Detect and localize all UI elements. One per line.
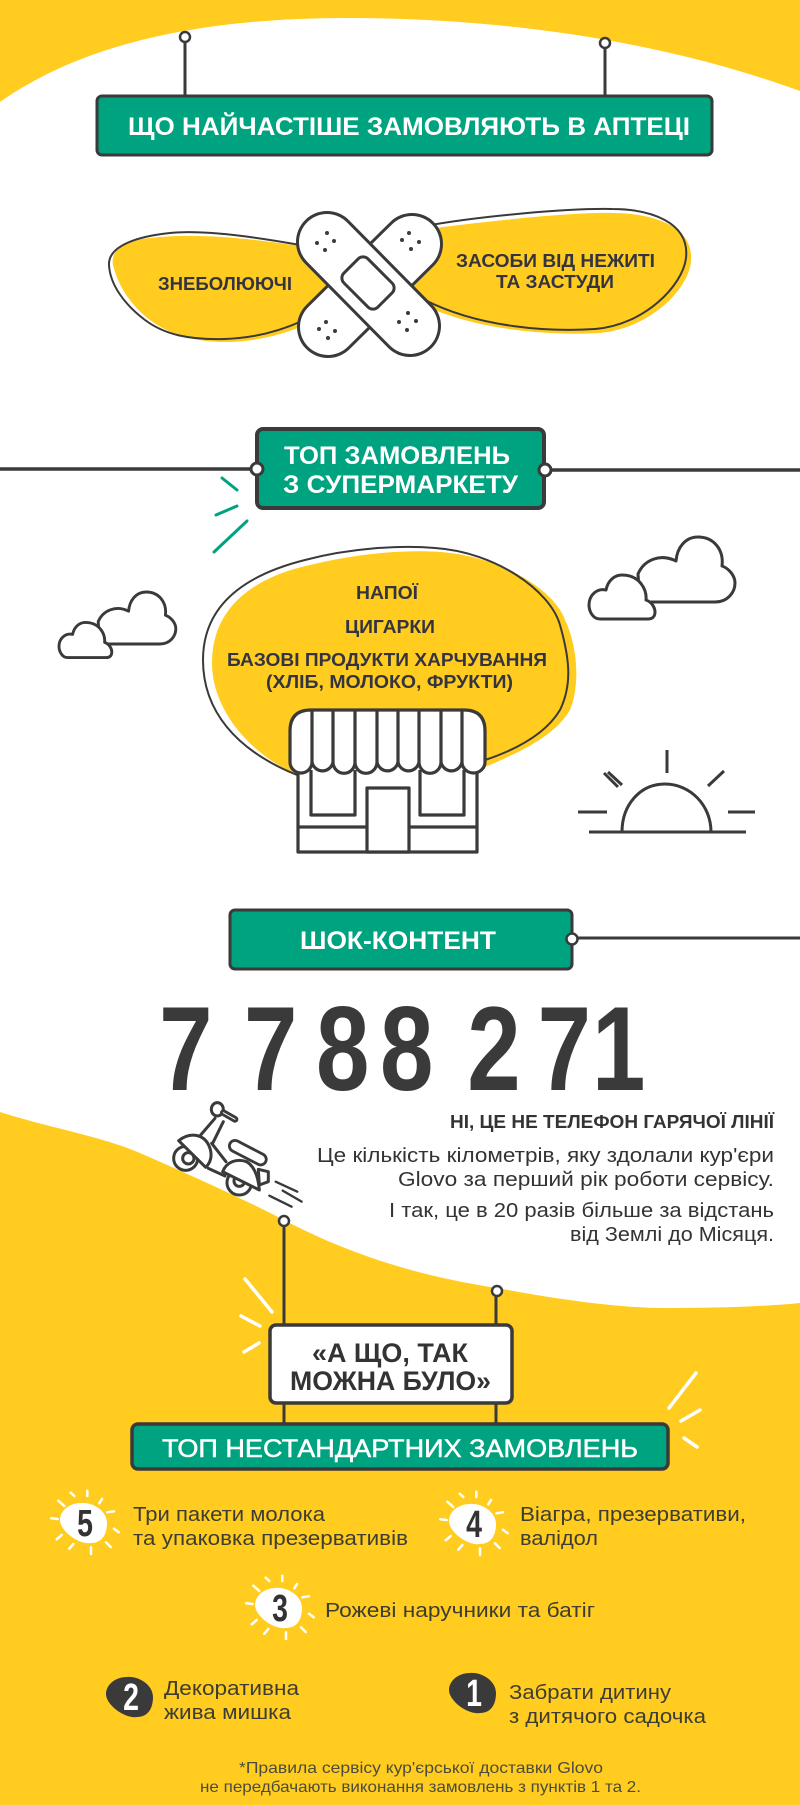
supermarket blob: НАПОЇ	[356, 583, 419, 603]
shock content heading sign	[230, 910, 800, 969]
item 3: 3	[272, 1588, 288, 1630]
green accent ticks	[214, 478, 247, 552]
item 5: та упаковка презервативів	[133, 1528, 408, 1550]
sign: unusual orders	[132, 1216, 668, 1469]
icon: sun on horizon	[578, 750, 755, 832]
item 5: 5	[77, 1503, 93, 1545]
right blob: cold remedies: ТА ЗАСТУДИ	[496, 272, 614, 292]
text block: explanation of the number: Це кількість кілометрів, яку здолали кур'єри	[317, 1145, 774, 1167]
text block: explanation of the number: від Землі до Місяця.	[570, 1224, 774, 1246]
supermarket blob: ЦИГАРКИ	[345, 617, 435, 637]
right clouds	[589, 537, 735, 619]
supermarket heading sign	[0, 429, 800, 508]
item 2: Декоративна	[164, 1678, 300, 1700]
item 1	[449, 1673, 707, 1728]
white accent ticks left	[241, 1279, 272, 1352]
item 4: Віагра, презервативи,	[520, 1504, 746, 1526]
icon: scooter	[174, 1103, 302, 1207]
item 4	[440, 1492, 746, 1555]
item 5: Три пакети молока	[133, 1504, 326, 1526]
footnote: *Правила сервісу кур'єрської доставки Glovo	[239, 1760, 603, 1777]
item 4: валідол	[520, 1528, 598, 1550]
text block: explanation of the number: Glovo за перший рік роботи сервісу.	[398, 1169, 774, 1191]
top yellow wave	[0, 0, 800, 102]
shock content heading sign: ШОК-КОНТЕНТ	[300, 927, 496, 955]
item 3: Рожеві наручники та батіг	[325, 1600, 595, 1622]
white accent ticks right	[669, 1373, 700, 1447]
right blob: cold remedies	[395, 209, 691, 334]
item 4: 4	[466, 1504, 482, 1546]
text block: explanation of the number: НІ, ЦЕ НЕ ТЕЛЕФОН ГАРЯЧОЇ ЛІНІЇ	[450, 1112, 775, 1132]
item 5	[51, 1491, 408, 1554]
item 2: жива мишка	[164, 1702, 292, 1724]
footnote	[200, 1760, 641, 1796]
item 2: 2	[123, 1677, 139, 1719]
item 3	[246, 1576, 595, 1639]
pharmacy heading sign: ЩО НАЙЧАСТІШЕ ЗАМОВЛЯЮТЬ В АПТЕЦІ	[128, 111, 690, 141]
left blob: painkillers	[109, 232, 340, 342]
text block: explanation of the number: І так, це в 20 разів більше за відстань	[389, 1200, 774, 1222]
right blob: cold remedies: ЗАСОБИ ВІД НЕЖИТІ	[456, 251, 655, 271]
footnote: не передбачають виконання замовлень з пунктів 1 та 2.	[200, 1779, 641, 1796]
sign: unusual orders: ТОП НЕСТАНДАРТНИХ ЗАМОВЛЕНЬ	[162, 1435, 638, 1463]
supermarket heading sign: З СУПЕРМАРКЕТУ	[283, 471, 518, 499]
sign: unusual orders: МОЖНА БУЛО»	[290, 1366, 491, 1396]
left clouds	[59, 592, 176, 658]
supermarket blob	[203, 547, 576, 776]
pharmacy heading sign	[97, 32, 712, 155]
big number: 7 788 271	[159, 983, 645, 1117]
item 2	[106, 1677, 300, 1724]
icon: crossed plasters	[315, 231, 421, 340]
item 1: Забрати дитину	[509, 1682, 671, 1704]
supermarket blob: БАЗОВІ ПРОДУКТИ ХАРЧУВАННЯ	[227, 650, 547, 670]
text block: explanation of the number	[317, 1112, 775, 1246]
item 1: з дитячого садочка	[509, 1706, 707, 1728]
bottom yellow wave background	[0, 1112, 800, 1805]
supermarket blob: (ХЛІБ, МОЛОКО, ФРУКТИ)	[266, 672, 513, 692]
icon: store	[290, 710, 485, 852]
sign: unusual orders: «А ЩО, ТАК	[312, 1338, 469, 1368]
item 1: 1	[466, 1673, 482, 1715]
supermarket heading sign: ТОП ЗАМОВЛЕНЬ	[284, 442, 510, 470]
left blob: painkillers: ЗНЕБОЛЮЮЧІ	[158, 274, 292, 294]
